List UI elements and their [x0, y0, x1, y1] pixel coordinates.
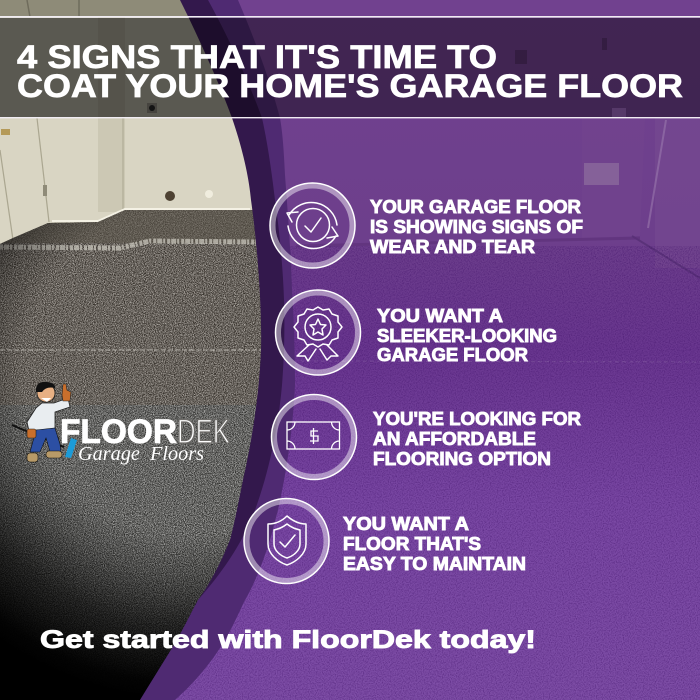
- sign 2 text: [377, 306, 557, 365]
- wordmark: [60, 413, 230, 465]
- sign 3 text: YOU'RE LOOKING FOR: [373, 409, 581, 429]
- floor grain: [170, 246, 700, 700]
- wordmark: DEK: [177, 413, 230, 451]
- sign 3 text: FLOORING OPTION: [373, 449, 551, 469]
- wordmark: Garage Floors: [78, 443, 204, 465]
- sign 4 text: YOU WANT A: [343, 514, 469, 534]
- icon: award ribbon with star: [276, 290, 360, 375]
- title banner: [0, 16, 700, 118]
- icon: dollar bill: [272, 394, 356, 480]
- banner shading on photo: [0, 18, 270, 117]
- sign 1 text: [370, 197, 583, 257]
- title text: 4 SIGNS THAT IT'S TIME TO: [17, 39, 497, 75]
- icon: shield with check: [244, 498, 329, 584]
- ghost photo details in purple: [296, 118, 700, 362]
- title text: [17, 39, 683, 104]
- photo: garage walls and speckled floor: [0, 0, 262, 678]
- panel: purple curved overlay: [140, 0, 700, 700]
- logo: FloorDek Garage Floors: [12, 382, 230, 465]
- sign 2 text: YOU WANT A: [377, 306, 503, 326]
- mascot: [12, 382, 77, 462]
- icon: circular arrows with check: [270, 183, 355, 268]
- sign 3 text: [373, 409, 581, 469]
- sign 2 text: SLEEKER-LOOKING: [377, 326, 557, 346]
- wordmark: FLOOR: [60, 413, 177, 451]
- title text: COAT YOUR HOME'S GARAGE FLOOR: [17, 68, 683, 104]
- sign 4 text: [343, 514, 526, 574]
- sign 1 text: IS SHOWING SIGNS OF: [370, 217, 583, 237]
- sign 1 text: YOUR GARAGE FLOOR: [370, 197, 581, 217]
- sign 1 text: WEAR AND TEAR: [370, 237, 535, 257]
- sign 4 text: EASY TO MAINTAIN: [343, 554, 526, 574]
- speckled floor: [0, 205, 270, 700]
- footer call to action: Get started with FloorDek today!: [40, 626, 536, 654]
- sign 3 text: AN AFFORDABLE: [373, 429, 536, 449]
- sign 2 text: GARAGE FLOOR: [377, 345, 528, 365]
- sign 4 text: FLOOR THAT'S: [343, 534, 481, 554]
